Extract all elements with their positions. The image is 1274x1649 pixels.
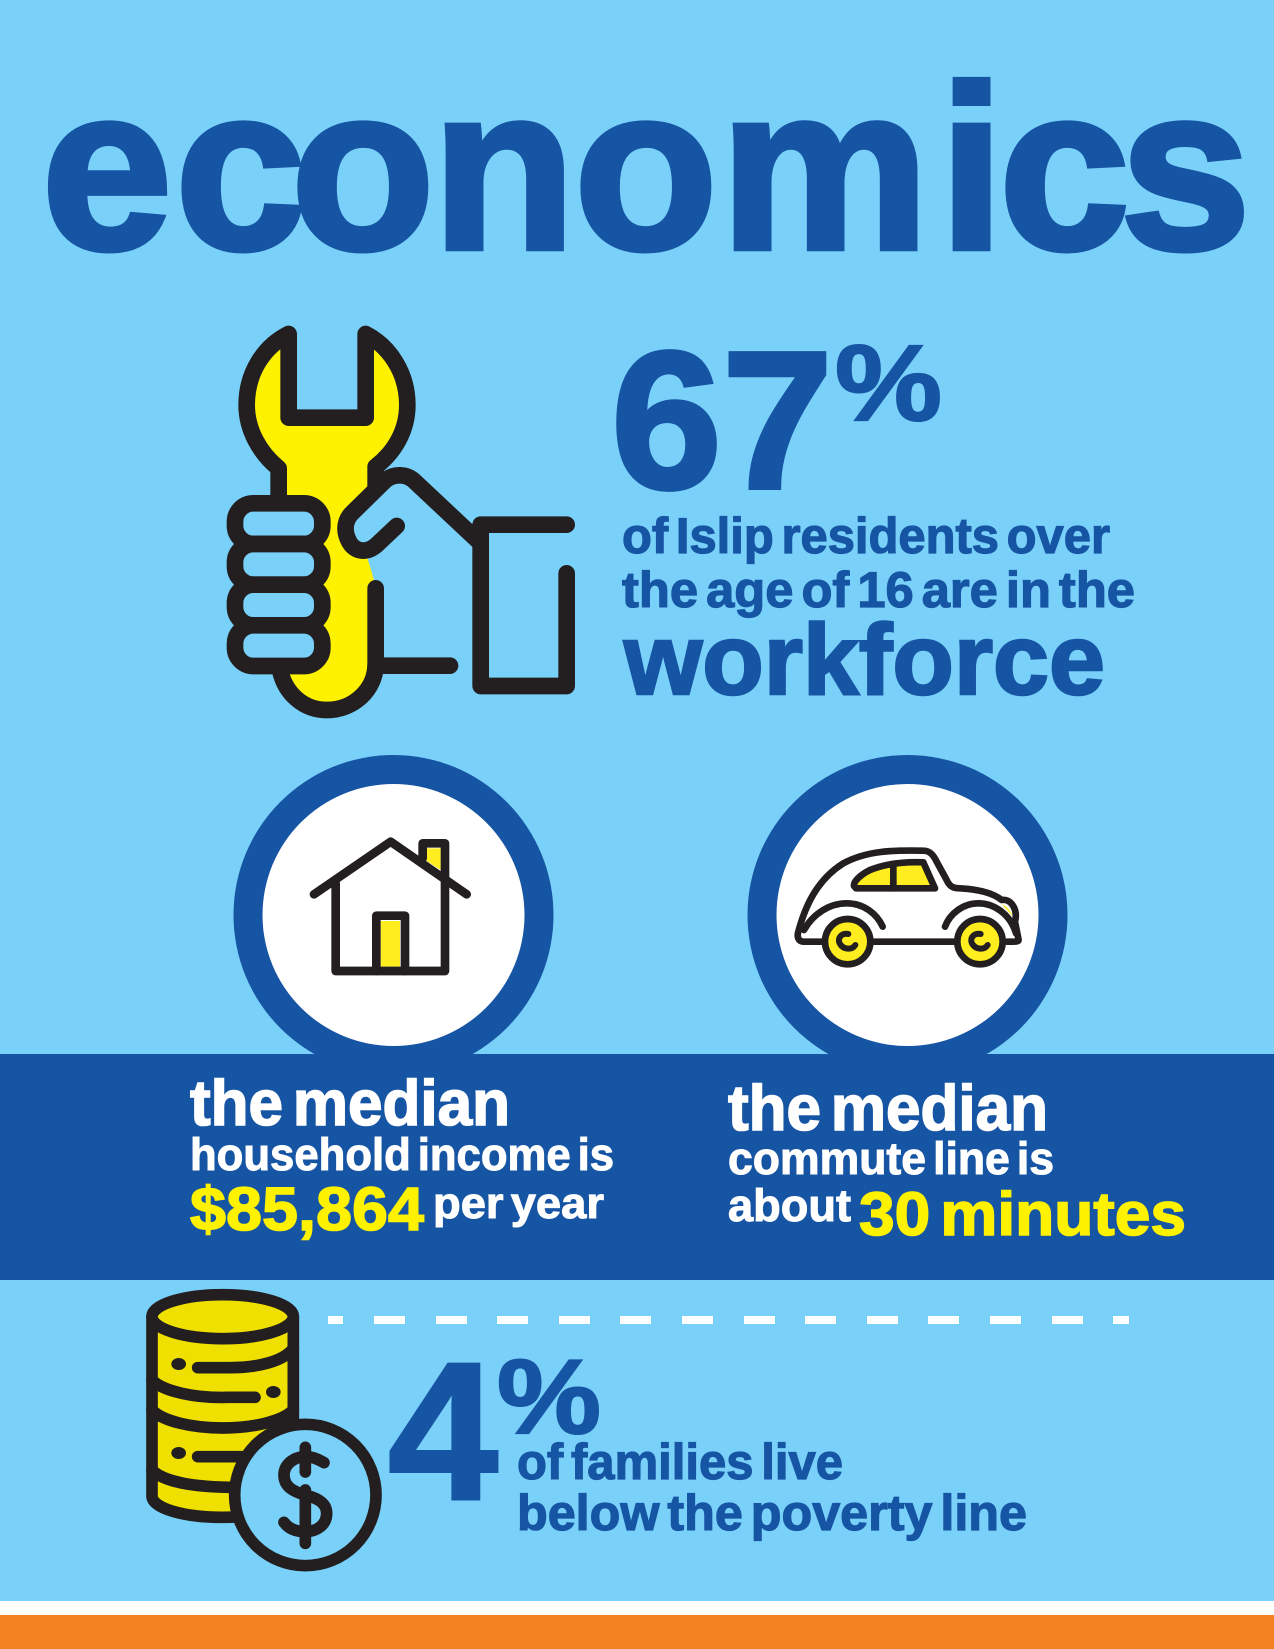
text block: median household income: the median — [190, 1067, 510, 1139]
statistic: 67 percent: of Islip residents over — [622, 508, 1110, 564]
footer stripe: orange — [0, 1615, 1274, 1649]
dashed divider — [328, 1316, 1129, 1324]
icon: hand holding wrench — [235, 334, 567, 710]
text block: median household income: household income is — [190, 1129, 614, 1180]
statistic: 4 percent: of families live — [517, 1434, 843, 1490]
text block: median commute: about — [728, 1180, 851, 1231]
panel: blue band — [0, 1054, 1274, 1280]
title: economics — [42, 38, 1251, 298]
text block: median household income — [190, 1067, 614, 1243]
icon: coin stack with dollar — [152, 1295, 376, 1566]
statistic: 67 percent: % — [835, 322, 942, 443]
text block: median commute: 30 minutes — [859, 1180, 1186, 1248]
text block: median household income: $85,864 — [190, 1175, 424, 1243]
statistic: 4 percent — [388, 1322, 1027, 1541]
icon: house in circle — [234, 755, 554, 1075]
statistic: 67 percent — [611, 311, 1135, 716]
statistic: 67 percent: workforce — [623, 604, 1105, 716]
statistic: 67 percent: the age of 16 are in the — [622, 562, 1135, 618]
statistic: 4 percent: 4 — [388, 1322, 498, 1541]
icon: car in circle — [748, 755, 1068, 1075]
statistic: 4 percent: below the poverty line — [517, 1485, 1027, 1541]
text block: median commute — [728, 1072, 1186, 1248]
footer stripe: white — [0, 1601, 1274, 1615]
statistic: 4 percent: % — [497, 1338, 601, 1456]
text block: median household income: per year — [433, 1179, 604, 1228]
statistic: 67 percent: 67 — [611, 311, 833, 530]
text block: median commute: the median — [728, 1072, 1048, 1144]
text block: median commute: commute line is — [728, 1133, 1054, 1184]
